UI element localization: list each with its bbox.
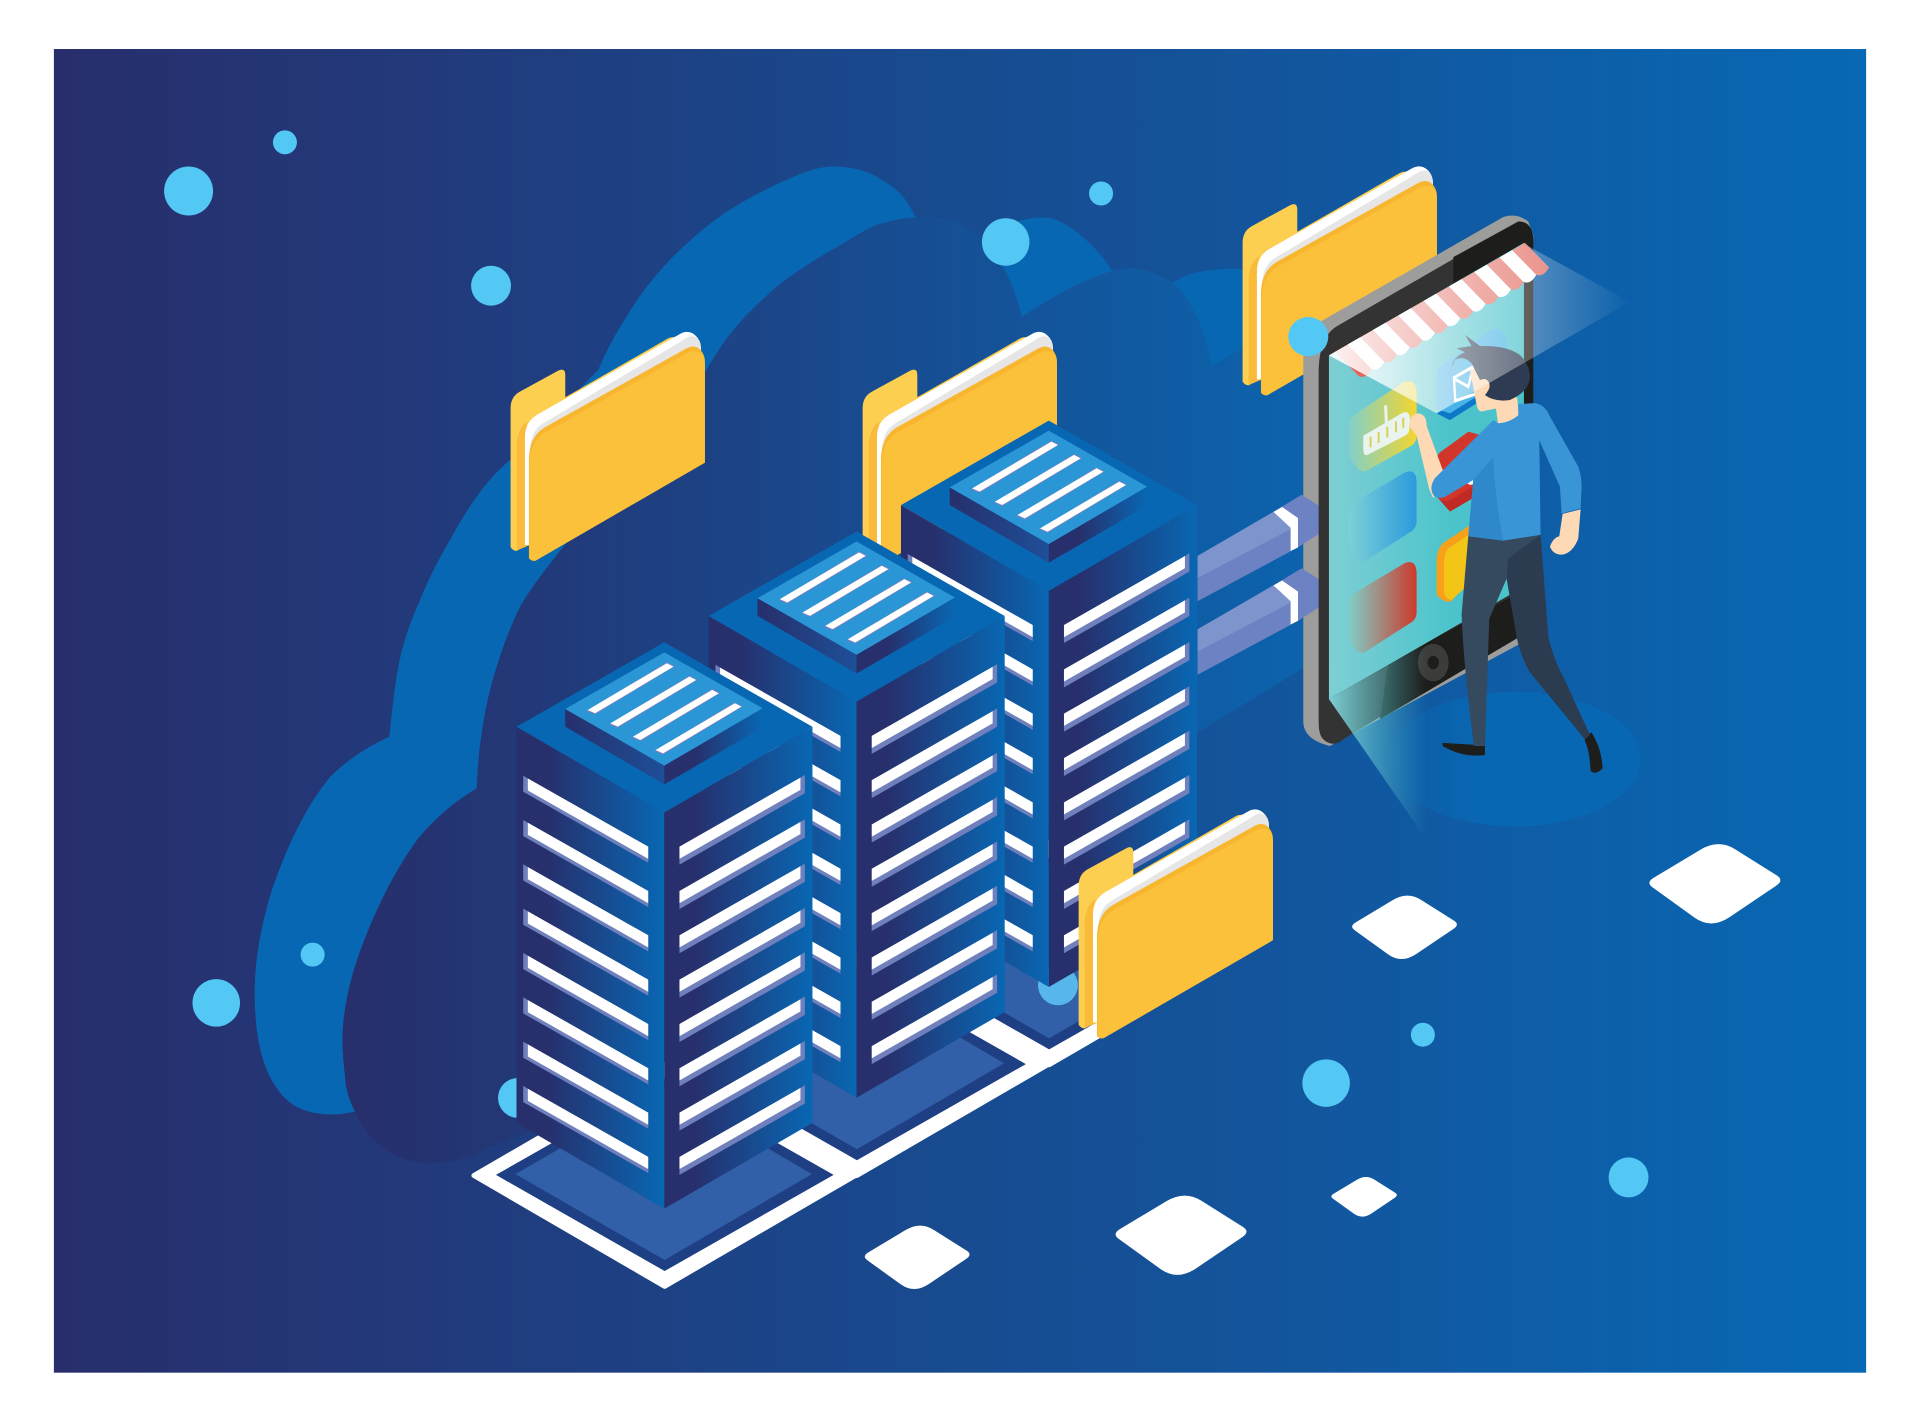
person: left arm skin <box>1410 413 1445 498</box>
cloud: back layer <box>255 167 1347 1150</box>
person: ear <box>1478 379 1490 392</box>
phone: dark front <box>1319 221 1533 744</box>
dots: floating light-blue circles <box>164 130 1649 1197</box>
phone: screen <box>1329 243 1524 699</box>
folder: behind towers <box>863 332 1057 561</box>
tiles: white rounded floor diamonds <box>865 844 1780 1289</box>
person: sweater <box>1431 403 1582 541</box>
awning <box>1335 243 1549 377</box>
server rack 2 base <box>666 954 1048 1176</box>
app icon: red <box>1348 562 1417 653</box>
phone: black lower bezel <box>1380 590 1524 719</box>
person: right hand <box>1550 509 1581 555</box>
folder: front right <box>1079 809 1273 1038</box>
phone with person <box>1288 221 1630 840</box>
folder: behind phone <box>1243 166 1437 395</box>
phone: blue corner dot <box>1288 317 1328 356</box>
floor ellipse under person <box>1389 692 1641 827</box>
person: front leg <box>1462 535 1541 746</box>
server base light dot <box>1038 965 1078 1005</box>
server rack 3 base <box>858 843 1240 1065</box>
app icon: red behind person <box>1437 432 1483 512</box>
app icon: basket <box>1348 381 1417 471</box>
person: back leg <box>1507 535 1590 739</box>
server rack 3 <box>901 421 1197 987</box>
folder: top left <box>511 332 705 561</box>
person: left shoe <box>1443 743 1485 756</box>
connector cables <box>1198 495 1319 675</box>
person: sweater shadow <box>1468 457 1503 541</box>
cloud: front layer <box>342 217 1359 1163</box>
phone: home button <box>1418 644 1449 681</box>
phone: gray side <box>1303 216 1533 746</box>
server rack 1 <box>516 642 812 1209</box>
app icon: blue <box>1348 471 1417 562</box>
person: hair <box>1452 335 1530 401</box>
person: right shoe <box>1585 733 1603 773</box>
app icon: yellow behind person <box>1437 523 1480 602</box>
app icon: mail <box>1437 329 1507 420</box>
phone: black upper bezel <box>1453 221 1533 418</box>
server rack 1 base <box>474 1065 855 1286</box>
glow: bottom projection cone <box>1329 643 1427 840</box>
person <box>1410 335 1603 773</box>
glow: top projection cone <box>1329 244 1630 413</box>
phone: speaker <box>1388 271 1449 310</box>
server rack 2 <box>709 531 1005 1098</box>
person: neck and face <box>1470 364 1519 426</box>
